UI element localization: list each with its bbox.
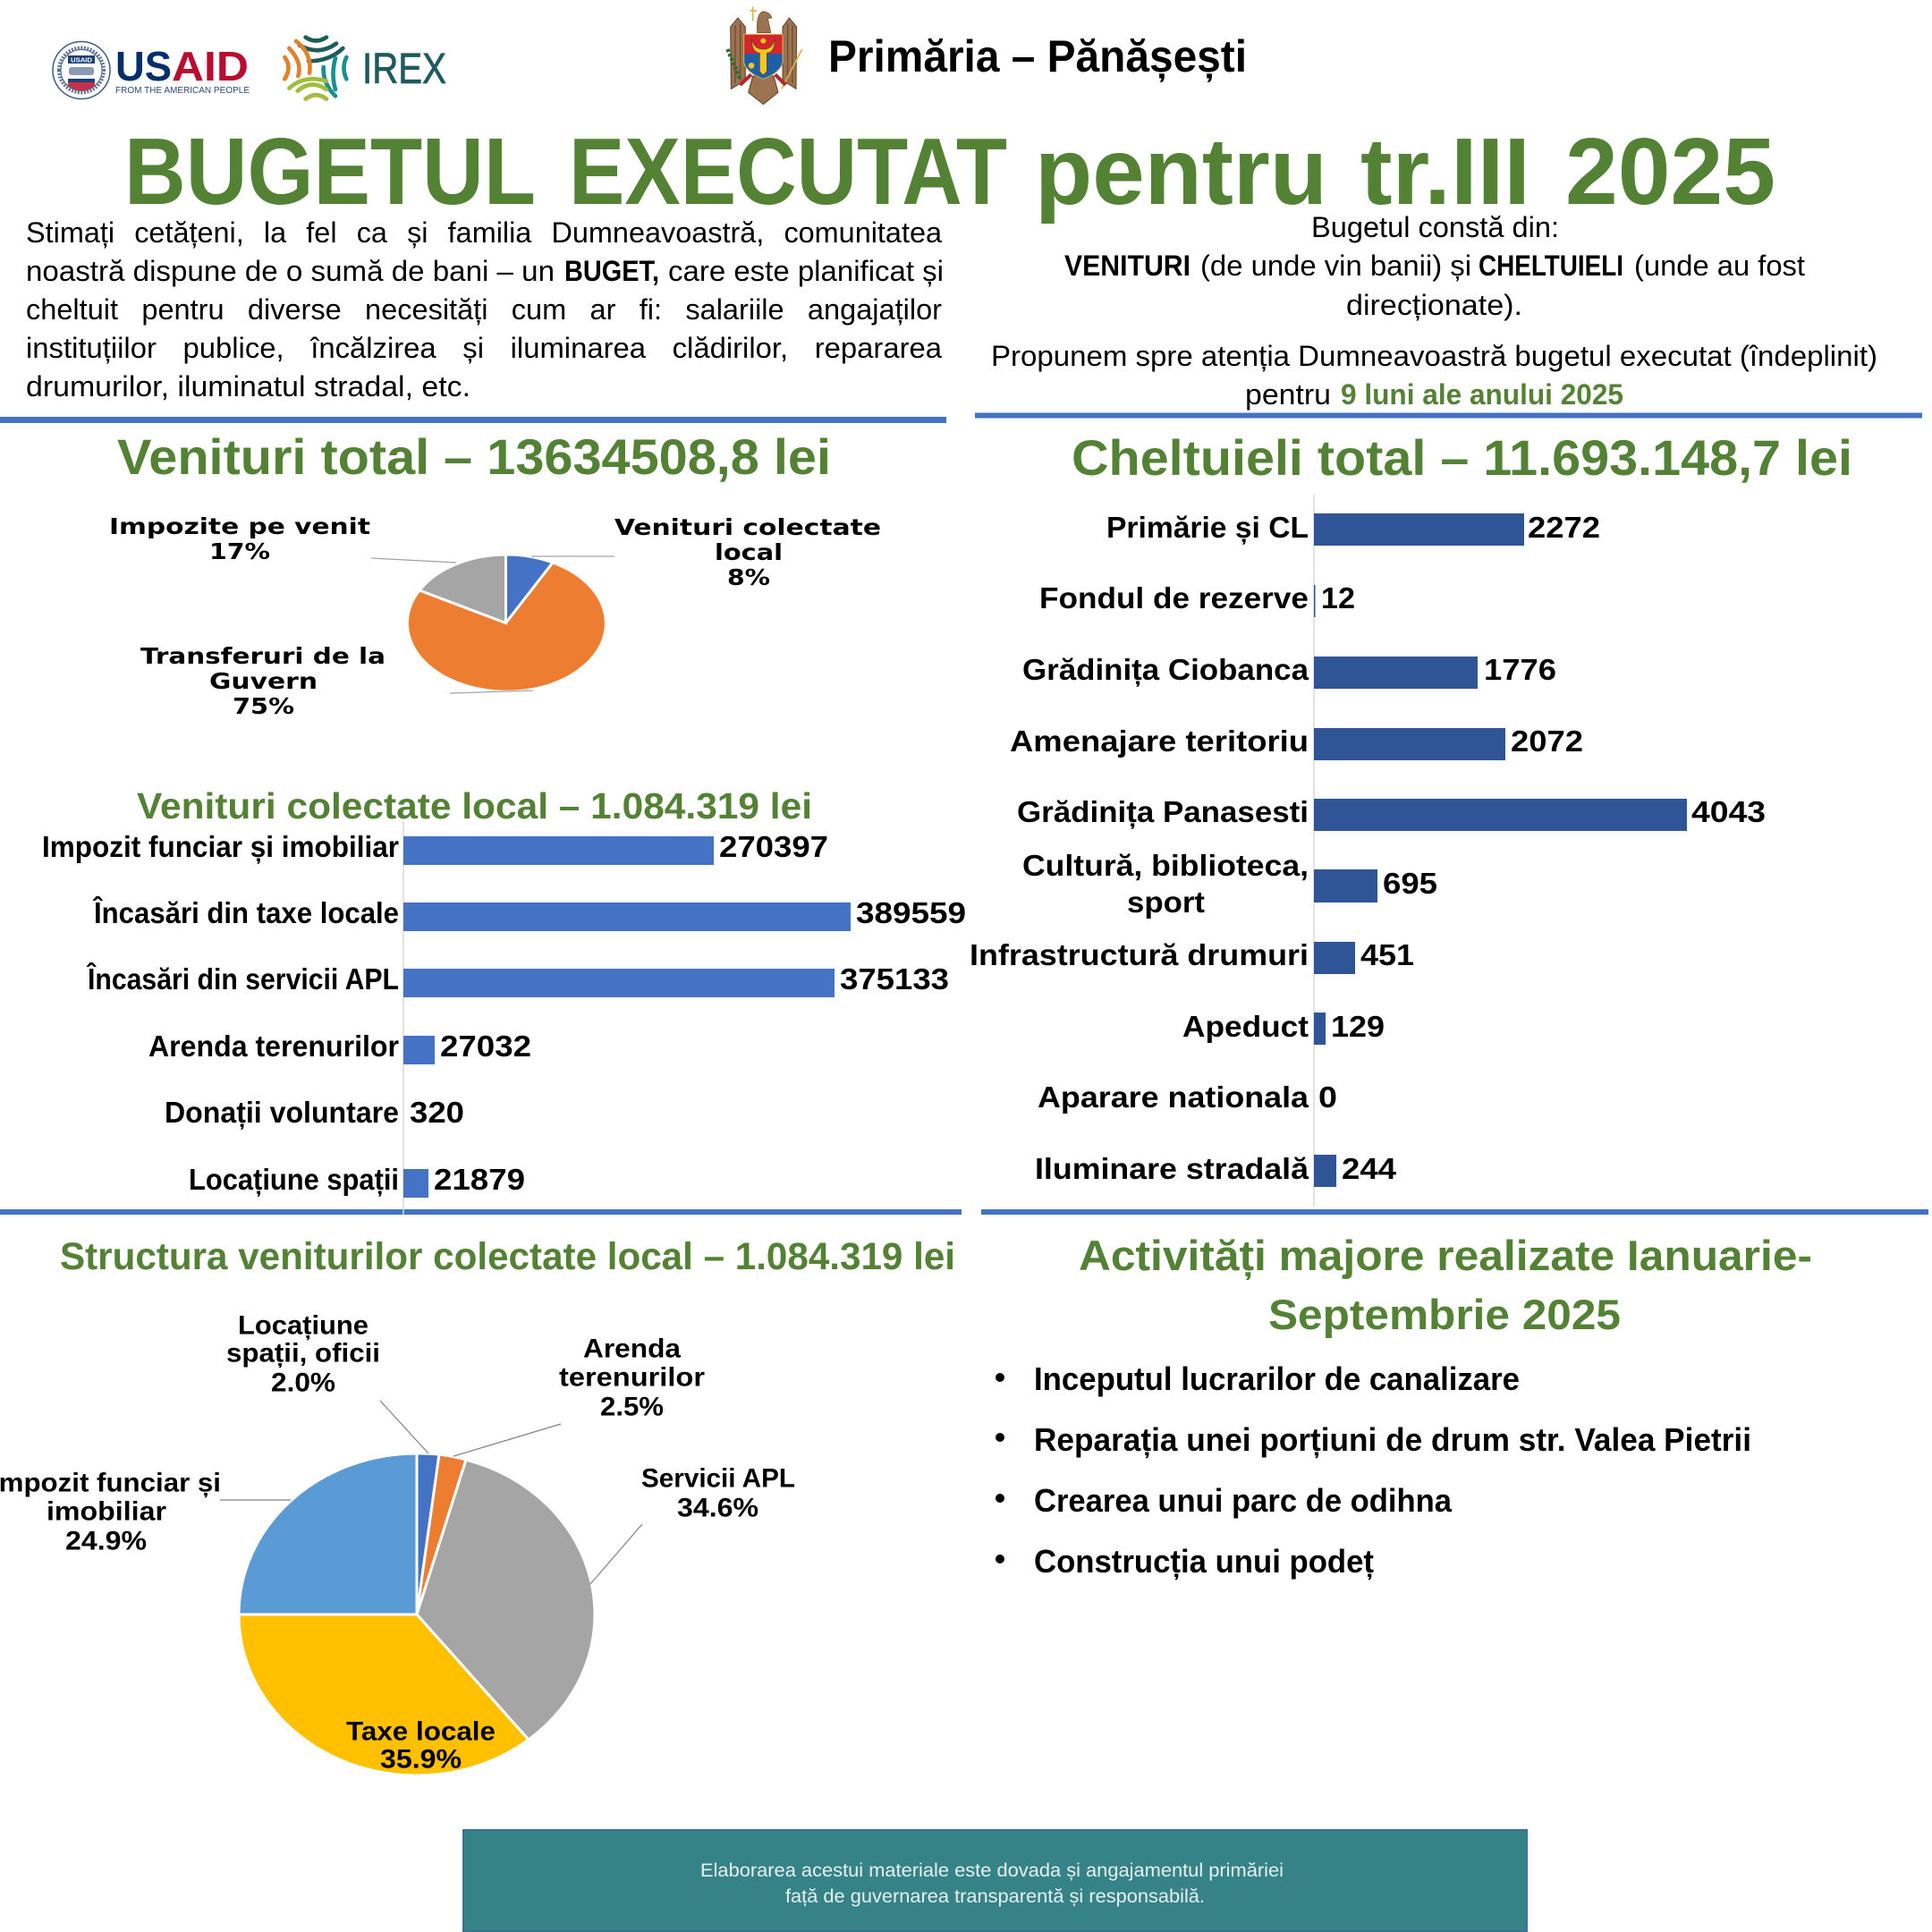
bar chart: cheltuieli: Grădinița Panasesti: [1017, 796, 1309, 829]
bar chart: cheltuieli: sport: [1127, 886, 1205, 919]
intro text left: cheltuit pentru diverse necesități cum ar fi: salariile angajaților: [26, 293, 942, 326]
pie label: venituri colectate local: Venituri colectate: [614, 514, 881, 540]
heading: activități majore: Activități majore realizate Ianuarie-: [1079, 1232, 1812, 1280]
bar chart: cheltuieli: [970, 495, 1766, 1207]
pie label: taxe locale: [346, 1717, 496, 1775]
pie label: servicii APL: 34.6%: [677, 1494, 758, 1522]
logo: USAID: US: [115, 43, 172, 89]
intro text right: (de unde vin banii) și: [1200, 250, 1471, 282]
intro text left: Stimați cetățeni, la fel ca și familia Dumneavoastră, comunitatea: [26, 216, 942, 249]
intro text left: BUGET,: [564, 255, 659, 287]
pie label: impozit funciar: [0, 1469, 221, 1556]
pie label: venituri colectate local: 8%: [727, 564, 770, 590]
activity list: Reparația unei porțiuni de drum str. Valea Pietrii: [1034, 1421, 1751, 1459]
bar chart: venituri colectate local: Încasări din servicii APL: [86, 962, 399, 996]
heading: activități majore: Septembrie 2025: [1268, 1291, 1621, 1338]
bar chart: cheltuieli: Primărie și CL: [1106, 512, 1309, 545]
bar chart: cheltuieli: 1776: [1484, 654, 1556, 687]
pie label: arenda terenurilor: [559, 1335, 706, 1422]
intro text right: [991, 211, 1877, 411]
activity list: Inceputul lucrarilor de canalizare: [1034, 1360, 1520, 1397]
activity list: Crearea unui parc de odihna: [1034, 1482, 1453, 1519]
intro text left: instituțiilor publice, încălzirea și iluminarea clădirilor, repararea: [26, 332, 942, 364]
footer banner: față de guvernarea transparentă și responsabilă.: [785, 1886, 1205, 1907]
panel: activități majore: [996, 1232, 1812, 1580]
bar chart: venituri colectate local: Încasări din taxe locale: [92, 896, 399, 930]
bar chart: cheltuieli: Apeduct: [1182, 1011, 1309, 1044]
pie label: taxe locale: Taxe locale: [346, 1717, 496, 1746]
header: logos and municipality name: [53, 6, 1247, 105]
intro text right: VENITURI: [1064, 250, 1191, 282]
pie label: venituri colectate local: local: [715, 539, 783, 565]
bar chart: cheltuieli: 244: [1342, 1153, 1396, 1186]
pie label: impozite pe venit: 17%: [209, 538, 270, 564]
title: tr.III: [1360, 119, 1530, 225]
title: [124, 119, 1775, 225]
bar chart: cheltuieli: 2072: [1511, 725, 1583, 758]
pie label: arenda terenurilor: 2.5%: [600, 1392, 664, 1422]
pie label: taxe locale: 35.9%: [380, 1744, 462, 1775]
bar chart: cheltuieli: Fondul de rezerve: [1039, 582, 1309, 615]
logo: USAID: FROM THE AMERICAN PEOPLE: [115, 85, 250, 96]
pie label: impozite pe venit: [109, 513, 370, 564]
bar chart: venituri colectate local: [42, 821, 966, 1216]
bar chart: cheltuieli: 2272: [1528, 512, 1600, 545]
intro text right: direcționate).: [1346, 289, 1522, 321]
bar chart: cheltuieli: 0: [1318, 1081, 1337, 1114]
logo: USAID: AID: [172, 43, 249, 89]
pie label: locațiune spații: 2.0%: [271, 1368, 335, 1397]
bar chart: venituri colectate local: 27032: [440, 1030, 531, 1063]
bar chart: venituri colectate local: 389559: [856, 897, 966, 930]
title: BUGETUL: [124, 119, 536, 225]
pie label: transferuri de la guvern: 75%: [233, 693, 294, 719]
pie label: locațiune spații: Locațiune: [238, 1311, 369, 1340]
municipality name: Primăria – Pănășești: [828, 31, 1247, 81]
pie label: locațiune spații: [226, 1311, 380, 1397]
bar chart: cheltuieli: Infrastructură drumuri: [970, 939, 1309, 972]
intro text right: (unde au fost: [1634, 250, 1805, 282]
pie label: locațiune spații: spații, oficii: [226, 1338, 380, 1368]
bar chart: venituri colectate local: 270397: [719, 831, 828, 864]
pie label: servicii APL: [641, 1463, 795, 1522]
bar chart: venituri colectate local: 21879: [434, 1164, 525, 1197]
pie label: venituri colectate local: [614, 514, 881, 590]
activity list: Construcția unui podeț: [1034, 1543, 1374, 1580]
intro text left: [26, 216, 944, 402]
title: EXECUTAT: [569, 119, 1007, 225]
intro text left: noastră dispune de o sumă de bani – un: [26, 255, 555, 287]
bar chart: venituri colectate local: Donații voluntare: [165, 1097, 399, 1130]
pie label: impozit funciar: 24.9%: [65, 1526, 147, 1556]
intro text right: 9 luni ale anului 2025: [1341, 378, 1623, 411]
title: 2025: [1565, 119, 1775, 225]
icon: coat of arms of Moldova: [727, 6, 802, 105]
intro text right: CHELTUIELI: [1479, 250, 1623, 282]
pie label: transferuri de la guvern: [140, 643, 386, 719]
bar chart: cheltuieli: 451: [1360, 939, 1414, 972]
intro text right: Propunem spre atenția Dumneavoastră bugetul executat (îndeplinit): [991, 340, 1877, 372]
panel: structura veniturilor colectate local: [0, 1235, 955, 1775]
heading: venituri total: Venituri total – 13634508,8 lei: [117, 428, 831, 485]
pie label: impozite pe venit: Impozite pe venit: [109, 513, 370, 539]
bar chart: cheltuieli: 4043: [1691, 796, 1766, 829]
pie chart: structura veniturilor: [220, 1401, 642, 1775]
pie label: arenda terenurilor: terenurilor: [559, 1363, 706, 1392]
pie label: impozit funciar: imobiliar: [47, 1497, 167, 1526]
bar chart: cheltuieli: 129: [1331, 1011, 1385, 1044]
bar chart: venituri colectate local: Arenda terenurilor: [148, 1030, 399, 1063]
bar chart: cheltuieli: 12: [1321, 582, 1355, 615]
intro text right: Bugetul constă din:: [1311, 211, 1559, 243]
logo: USAID: [53, 41, 250, 98]
logo: USAID: USAID: [71, 57, 92, 64]
pie label: transferuri de la guvern: Transferuri de la: [140, 643, 386, 669]
panel: cheltuieli total: [970, 429, 1852, 1207]
bar chart: cheltuieli: Grădinița Ciobanca: [1022, 654, 1309, 687]
bar chart: cheltuieli: 695: [1383, 868, 1437, 901]
intro text right: pentru: [1245, 378, 1331, 411]
activity list: [996, 1360, 1751, 1580]
pie label: arenda terenurilor: Arenda: [583, 1335, 682, 1363]
bar chart: cheltuieli: Aparare nationala: [1038, 1081, 1309, 1114]
bar chart: venituri colectate local: 320: [410, 1097, 464, 1130]
heading: cheltuieli total: Cheltuieli total – 11.693.148,7 lei: [1072, 429, 1852, 486]
heading: structura veniturilor: Structura veniturilor colectate local – 1.084.319 lei: [60, 1235, 955, 1278]
bar chart: cheltuieli: Iluminare stradală: [1035, 1153, 1309, 1186]
panel: venituri total: [109, 428, 881, 719]
pie chart: venituri total: [371, 555, 614, 693]
footer banner: [463, 1830, 1527, 1931]
footer banner: Elaborarea acestui materiale este dovada și angajamentul primăriei: [700, 1860, 1284, 1881]
bar chart: cheltuieli: Amenajare teritoriu: [1010, 725, 1309, 758]
pie label: transferuri de la guvern: Guvern: [209, 668, 318, 694]
intro text left: drumurilor, iluminatul stradal, etc.: [26, 370, 470, 402]
pie label: servicii APL: Servicii APL: [641, 1463, 795, 1494]
intro text left: care este planificat și: [668, 255, 944, 287]
bar chart: venituri colectate local: Locațiune spații: [189, 1164, 399, 1197]
panel: venituri colectate local: [42, 785, 966, 1216]
bar chart: cheltuieli: Cultură, biblioteca,: [1022, 850, 1309, 883]
heading: activități majore: [1079, 1232, 1812, 1338]
logo: IREX: [284, 38, 446, 99]
heading: venituri colectate local: Venituri colectate local – 1.084.319 lei: [137, 785, 812, 826]
bar chart: venituri colectate local: 375133: [840, 963, 949, 996]
bar chart: venituri colectate local: Impozit funciar și imobiliar: [42, 831, 399, 864]
title: pentru: [1035, 119, 1327, 225]
logo: IREX: IREX: [362, 46, 446, 93]
